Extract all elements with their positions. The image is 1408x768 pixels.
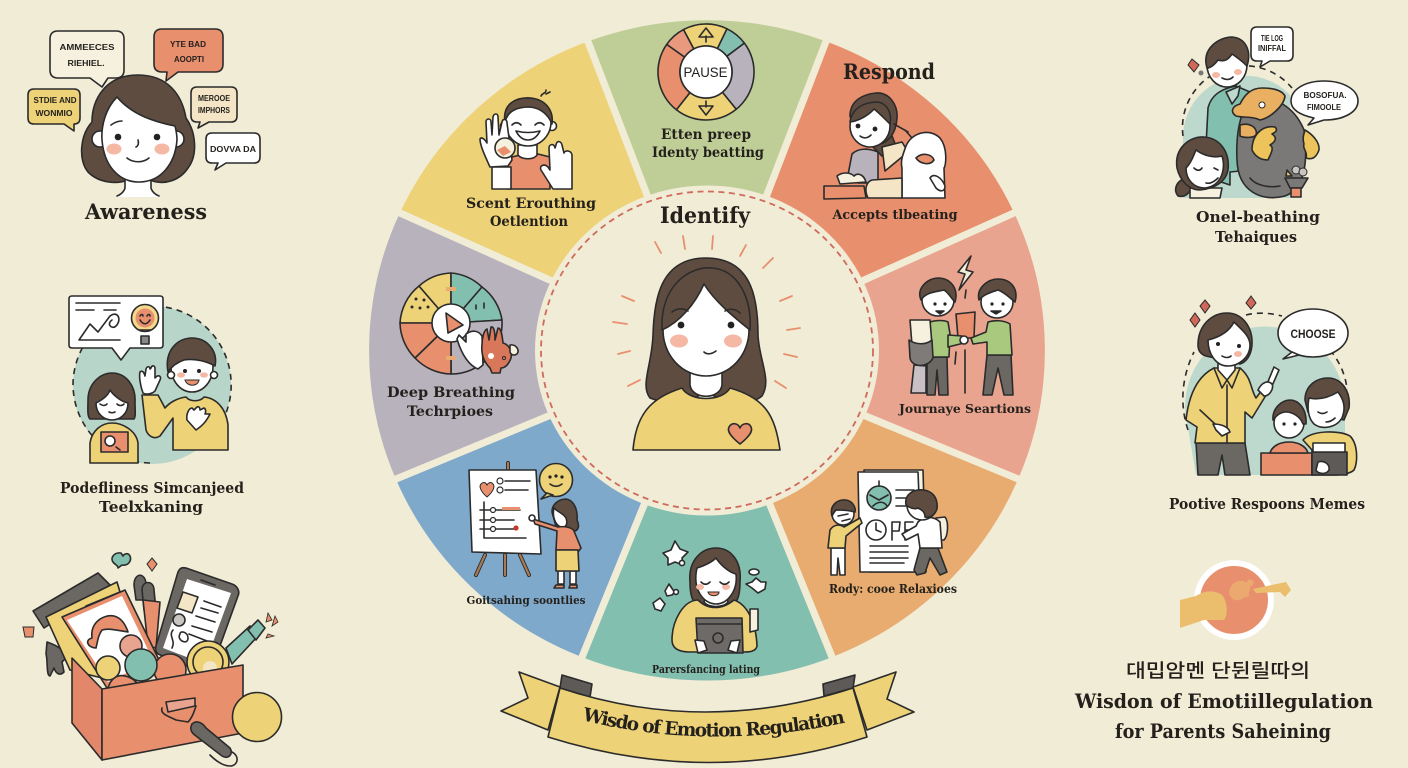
caption: Goitsahing soontlies xyxy=(466,593,586,607)
panel: right top family xyxy=(1176,27,1358,246)
man head xyxy=(171,342,213,392)
dark folder xyxy=(33,573,110,628)
ball in hand xyxy=(495,138,515,158)
balls xyxy=(96,635,229,688)
pen xyxy=(134,575,160,648)
title block: Wisdon of Emotiillegulation xyxy=(1074,689,1373,713)
smile xyxy=(516,131,540,140)
inner hub xyxy=(535,186,879,516)
pause caption: Etten preep xyxy=(661,127,751,143)
lists xyxy=(480,502,526,538)
dial xyxy=(400,273,502,374)
woman body xyxy=(1186,368,1268,443)
woman face xyxy=(850,105,890,147)
left hand xyxy=(480,114,512,167)
chart lines xyxy=(870,546,908,563)
pencil xyxy=(750,609,758,632)
cheeks xyxy=(670,334,688,348)
right child head xyxy=(907,490,937,520)
parent xyxy=(1303,432,1357,475)
clock xyxy=(866,520,886,540)
raised string xyxy=(894,124,912,138)
title block xyxy=(1074,660,1373,743)
phone in hand xyxy=(1267,367,1279,386)
girl body xyxy=(90,423,138,463)
panel: right mid choose xyxy=(1169,296,1365,513)
bubble 2: AOOPTI xyxy=(174,55,204,64)
waving hand xyxy=(140,366,161,394)
caption xyxy=(466,196,596,230)
panel: journal two people xyxy=(898,256,1031,416)
bubble right: FIMOOLE xyxy=(1307,103,1342,112)
ribbon banner: Wisdo of Emotion Regulation xyxy=(584,707,846,738)
pink book xyxy=(101,432,128,452)
side glove xyxy=(46,642,68,676)
pause caption xyxy=(652,127,764,161)
child eye xyxy=(916,154,934,164)
left sleeve xyxy=(492,167,511,189)
panel: easel planner xyxy=(466,463,586,607)
man body xyxy=(142,395,228,450)
girl xyxy=(1176,137,1228,198)
caption: Scent Erouthing xyxy=(466,196,596,212)
dashed arc xyxy=(1183,313,1347,430)
box side xyxy=(72,658,102,760)
bubble 3: WONMIO xyxy=(36,109,72,118)
caption: Teelxkaning xyxy=(99,499,203,516)
caption: Journaye Seartions xyxy=(898,401,1031,416)
bubble right xyxy=(1291,81,1358,125)
brush cup xyxy=(1285,166,1308,197)
right fold xyxy=(823,675,855,696)
caption: Rody: cooe Relaxioes xyxy=(829,582,957,596)
neck xyxy=(690,368,722,396)
cheeks xyxy=(106,144,122,154)
bubble 5 xyxy=(206,133,260,170)
girl xyxy=(529,499,581,588)
rays xyxy=(613,236,800,388)
teal circle xyxy=(73,306,231,464)
smile bubble xyxy=(540,464,572,499)
right person head xyxy=(981,286,1013,318)
man head xyxy=(1207,43,1247,87)
dashed hub ring xyxy=(541,192,873,510)
woman neck xyxy=(1218,362,1235,380)
yellow circle xyxy=(232,692,282,742)
chest hand xyxy=(187,407,210,430)
emotion wheel xyxy=(366,17,1048,684)
caption: Parersfancing lating xyxy=(652,662,760,676)
heart xyxy=(480,482,494,497)
panel: pause wheel xyxy=(652,24,764,161)
shirt details xyxy=(1200,368,1240,443)
cloth sash xyxy=(882,142,908,171)
yellow folder xyxy=(46,582,120,680)
panel: person with tablet xyxy=(652,541,766,676)
head xyxy=(505,98,551,146)
man body xyxy=(1205,86,1250,185)
neck xyxy=(518,145,537,159)
panel: left mid teaching xyxy=(60,296,244,516)
bubble top: TIE LOG xyxy=(1261,34,1283,43)
bubble 3 xyxy=(28,89,80,131)
dark box xyxy=(1312,452,1347,475)
bubble 1: AMMEECES xyxy=(60,43,115,52)
easel legs xyxy=(476,463,529,575)
lavender skirt xyxy=(911,365,926,393)
bubble right: BOSOFUA. xyxy=(1304,91,1346,100)
girl hair xyxy=(88,373,135,419)
right tail xyxy=(853,672,914,730)
handshake arm xyxy=(948,335,964,347)
arrow up xyxy=(699,28,713,42)
backpack xyxy=(936,517,948,540)
heading: Identify: Identify xyxy=(660,203,751,229)
tablet hands xyxy=(695,640,740,653)
left person head xyxy=(922,284,954,316)
bubble 4: MEROOE xyxy=(198,94,231,103)
caption: Pootive Respoons Memes xyxy=(1169,496,1365,513)
left fold xyxy=(560,675,592,697)
sparkles xyxy=(1190,296,1256,327)
right hand xyxy=(541,142,572,189)
right person torso xyxy=(971,321,1012,355)
arrow down xyxy=(699,101,713,115)
pause label: PAUSE xyxy=(684,65,728,80)
hair xyxy=(505,98,552,124)
chart sheet xyxy=(858,472,922,572)
magnifier tool xyxy=(162,706,237,766)
bangs xyxy=(662,268,750,330)
handle xyxy=(166,698,195,712)
left tail xyxy=(501,672,560,730)
woman body xyxy=(847,149,878,183)
caption: Tehaiques xyxy=(1215,229,1297,246)
caption xyxy=(387,385,515,420)
marker xyxy=(226,613,278,664)
box xyxy=(824,186,866,199)
board bubble xyxy=(69,296,163,360)
ribbon text xyxy=(582,720,848,737)
bubble 3: STDIE AND xyxy=(34,96,77,105)
sparkle xyxy=(1188,59,1199,72)
woman hair xyxy=(1198,313,1252,364)
panel: raised hands person xyxy=(466,90,596,230)
panel: toolbox xyxy=(23,553,282,766)
caption: Onel-beathing xyxy=(1196,209,1320,226)
glove marks xyxy=(488,353,494,359)
platypus head xyxy=(1233,88,1285,120)
bubble 5: DOVVA DA xyxy=(210,145,256,154)
book held xyxy=(956,312,975,338)
caption xyxy=(60,480,244,516)
face xyxy=(663,284,749,376)
phone xyxy=(156,568,239,673)
cream pillow xyxy=(866,178,902,198)
satchel xyxy=(909,340,933,366)
closed eyes and sprout xyxy=(512,90,550,125)
logo emblem xyxy=(1180,563,1291,637)
panel: respond caregiver and child xyxy=(824,93,958,223)
panel: relaxation papers xyxy=(828,470,957,596)
box contents xyxy=(1313,443,1345,452)
caption: Podefliness Simcanjeed xyxy=(60,480,244,497)
pause ring xyxy=(658,24,754,120)
teal circle xyxy=(1185,327,1345,475)
woman face xyxy=(1208,322,1250,366)
choose bubble xyxy=(1278,309,1348,359)
face xyxy=(696,558,736,604)
right child legs xyxy=(914,548,947,575)
dark scarf xyxy=(872,136,896,156)
wheel segments xyxy=(366,17,1048,684)
pause caption: Identy beatting xyxy=(652,145,764,161)
box xyxy=(1261,453,1312,475)
choose bubble: CHOOSE xyxy=(1290,329,1336,341)
right child body xyxy=(902,518,942,548)
bubble 2: YTE BAD xyxy=(170,40,206,49)
back sheet xyxy=(864,470,926,572)
caption: Accepts tlbeating xyxy=(832,208,958,223)
hair xyxy=(646,258,766,403)
ears xyxy=(500,122,510,130)
belly hand xyxy=(1213,424,1230,436)
belly line xyxy=(1250,178,1280,187)
left person legs xyxy=(927,357,948,395)
teal dial xyxy=(867,486,891,510)
panel: awareness xyxy=(28,29,260,224)
face xyxy=(102,97,177,182)
play arrow xyxy=(446,313,463,333)
left person torso xyxy=(928,320,950,357)
torso xyxy=(508,154,550,189)
panel: breathing dial xyxy=(387,273,518,420)
woman hair xyxy=(850,93,897,144)
white hand xyxy=(457,331,483,369)
child paw xyxy=(930,176,945,191)
hair xyxy=(690,548,740,606)
child blob xyxy=(901,132,946,198)
woman legs xyxy=(1196,443,1250,475)
title block: 대밉암멘 단뒨릴따의 xyxy=(1126,660,1310,682)
paper roll xyxy=(910,320,932,345)
board xyxy=(469,470,541,554)
bubble 4 xyxy=(191,87,237,128)
heading: Respond: Respond xyxy=(843,59,935,84)
eyes xyxy=(678,322,684,328)
neck xyxy=(116,178,160,197)
teal circle xyxy=(1183,76,1290,198)
platypus body xyxy=(1237,98,1306,198)
bubble top: INIFFAL xyxy=(1258,44,1286,53)
lightning xyxy=(958,256,973,290)
caption: Techrpioes xyxy=(407,404,493,420)
sparkles and leaf xyxy=(112,553,131,568)
ribbon banner xyxy=(500,671,915,764)
left child xyxy=(831,548,845,575)
center figure: woman with heart xyxy=(613,236,800,450)
photo frame xyxy=(62,590,160,688)
box front xyxy=(102,665,243,760)
caption xyxy=(1196,209,1320,246)
caption: Deep Breathing xyxy=(387,385,515,401)
eyes xyxy=(115,134,121,140)
bubble top xyxy=(1251,27,1293,67)
open book xyxy=(837,173,866,184)
right person legs xyxy=(983,355,1013,395)
bubble 4: IMPHORS xyxy=(198,106,231,115)
child xyxy=(1270,442,1308,453)
girl face xyxy=(96,390,128,420)
ribbon band xyxy=(548,688,867,762)
tablet xyxy=(696,618,743,653)
bubble 2 xyxy=(154,29,223,81)
bubble 1 xyxy=(50,31,124,87)
torso xyxy=(672,600,757,652)
dashed arc xyxy=(73,306,231,463)
title block: for Parents Saheining xyxy=(1115,719,1331,743)
ears xyxy=(92,131,108,147)
platypus arms xyxy=(1240,124,1256,137)
sparkles xyxy=(653,541,766,611)
dial marks xyxy=(476,303,484,309)
heart xyxy=(728,424,752,444)
heading: Awareness xyxy=(84,199,207,224)
bubble 1: RIEHIEL. xyxy=(68,59,104,68)
shirt xyxy=(633,388,780,450)
hair xyxy=(82,75,195,182)
orange glove xyxy=(482,327,511,373)
neck xyxy=(704,596,728,606)
caption: Oetlention xyxy=(490,214,568,230)
